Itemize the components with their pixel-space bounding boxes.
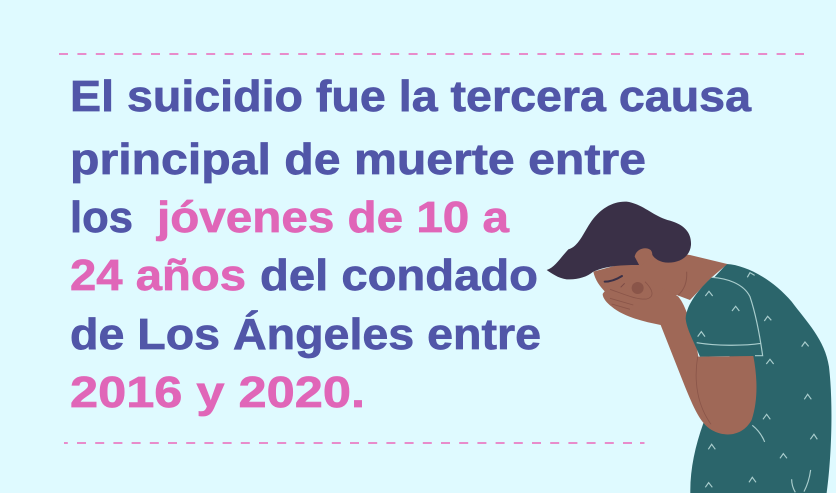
finger lines	[610, 282, 652, 309]
shirt body	[687, 264, 831, 493]
ear	[635, 248, 652, 267]
main message text	[70, 72, 752, 417]
cheek	[632, 282, 644, 294]
main message text: 24 años	[70, 251, 246, 300]
closed eye	[605, 276, 622, 282]
arm crease and shirt folds	[696, 357, 711, 424]
main message text: jóvenes de 10 a	[156, 193, 510, 242]
main message text: principal de muerte entre	[70, 135, 646, 184]
sleeve	[686, 277, 763, 357]
main message text: El suicidio fue la tercera causa	[70, 72, 752, 121]
hands and forearm	[603, 282, 756, 434]
hair	[547, 202, 691, 279]
main message text: de Los Ángeles entre	[70, 309, 541, 359]
neck and head	[593, 250, 727, 313]
illustration: person crying with face in hands	[547, 202, 831, 493]
sleeve stitching	[697, 277, 763, 356]
main message text: los	[70, 193, 133, 242]
main message text: del condado	[260, 251, 538, 300]
main message text: 2016 y 2020.	[70, 368, 365, 417]
shirt pattern marks	[698, 273, 817, 487]
